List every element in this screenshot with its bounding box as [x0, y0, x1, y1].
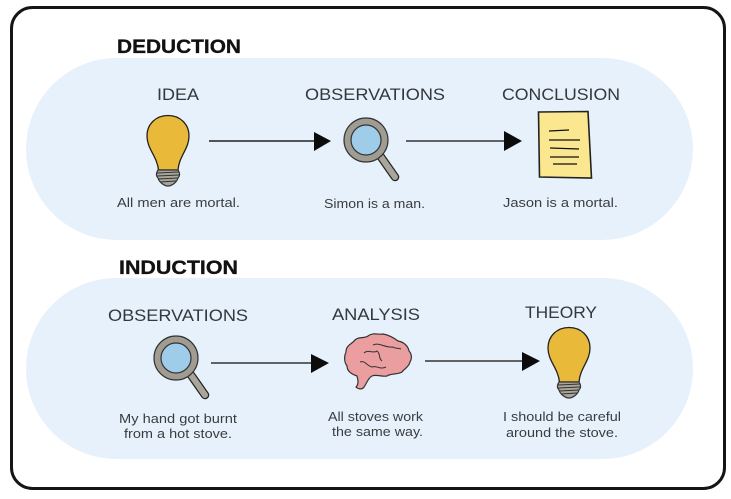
- caption: all stoves work: [328, 410, 424, 439]
- caption: all stoves work: the same way.: [332, 425, 423, 439]
- caption: my hand got burnt: My hand got burnt: [119, 412, 238, 426]
- panel: deduction: [26, 58, 693, 240]
- label: conclusion: CONCLUSION: [502, 85, 620, 104]
- label: observations: OBSERVATIONS: [108, 306, 248, 325]
- icon: magnifying glass: [154, 336, 205, 395]
- arrow: analysis to theory: [425, 352, 540, 371]
- heading: deduction: DEDUCTION: [117, 37, 241, 58]
- caption: my hand got burnt: [119, 412, 238, 441]
- icon: light bulb: [147, 116, 189, 186]
- icon: note page: [538, 112, 592, 178]
- label: idea: IDEA: [157, 85, 200, 104]
- icon: magnifying glass: [344, 118, 395, 177]
- panel: induction: [26, 278, 693, 459]
- label: theory: THEORY: [525, 303, 597, 322]
- panel background: [26, 278, 693, 459]
- label: analysis: ANALYSIS: [332, 305, 420, 324]
- arrow: idea to observations: [209, 132, 331, 151]
- caption: all men are mortal: All men are mortal.: [117, 196, 240, 210]
- caption: i should be careful: [503, 410, 621, 440]
- arrow: observations to analysis: [211, 354, 329, 373]
- caption: simon is a man: Simon is a man.: [324, 197, 425, 211]
- heading: induction: INDUCTION: [119, 258, 238, 279]
- label: observations: OBSERVATIONS: [305, 85, 445, 104]
- caption: my hand got burnt: from a hot stove.: [124, 427, 232, 441]
- caption: i should be careful: I should be careful: [503, 410, 621, 424]
- panel background: [26, 58, 693, 240]
- arrow: observations to conclusion: [406, 131, 522, 151]
- caption: all stoves work: All stoves work: [328, 410, 424, 424]
- caption: i should be careful: around the stove.: [506, 426, 618, 440]
- caption: jason is a mortal: Jason is a mortal.: [503, 196, 618, 210]
- icon: brain: [345, 334, 411, 389]
- icon: light bulb: [548, 328, 590, 398]
